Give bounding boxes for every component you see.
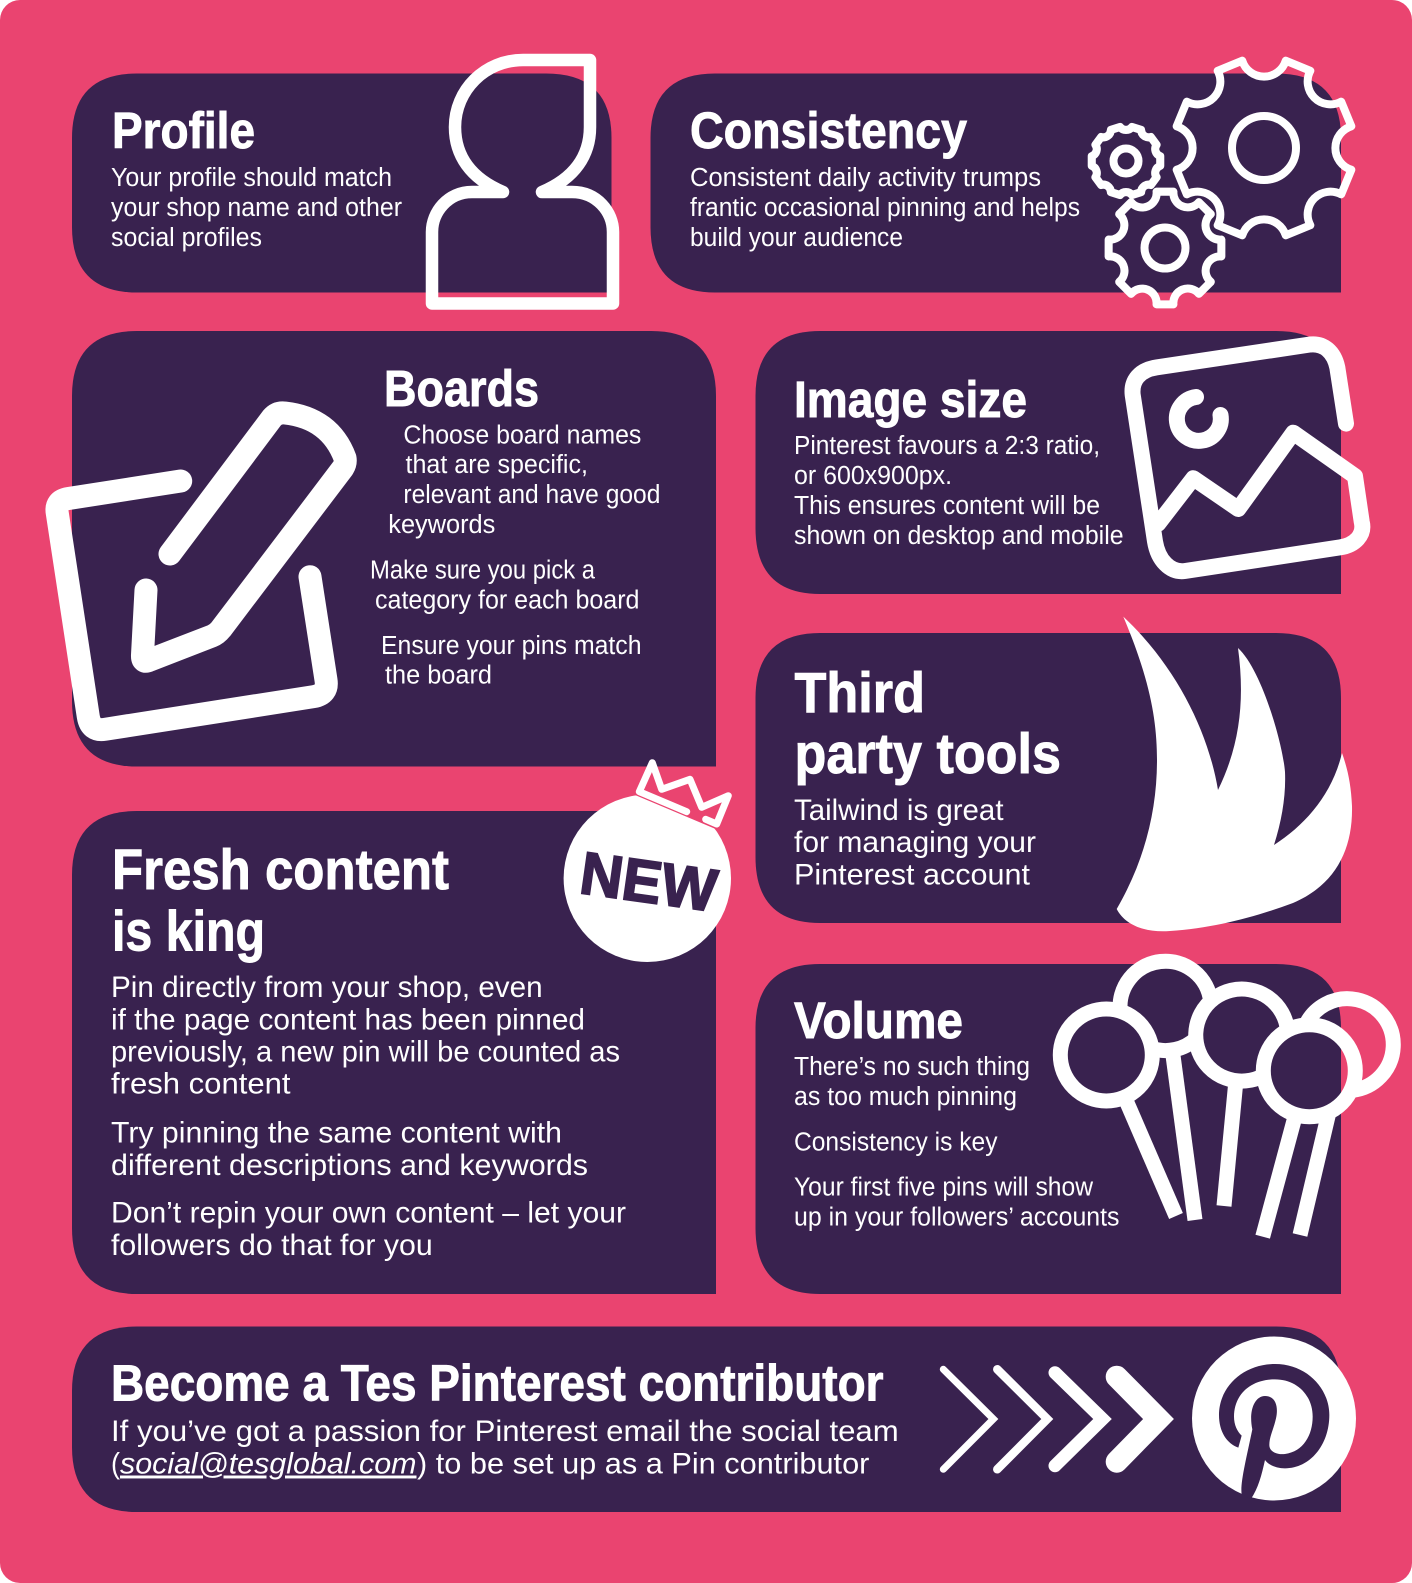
text: boards body: that are specific, [406,451,588,479]
text: image size body: shown on desktop and mobile [794,522,1124,550]
heading: profile: Profile [112,102,255,159]
panel: image size [756,331,1362,594]
icon: person [432,60,613,304]
heading: fresh content: Fresh content [112,838,449,902]
small gear [1092,127,1160,195]
text: volume body: Consistency is key [794,1128,998,1156]
text: boards body: keywords [388,511,495,539]
text: consistency body: build your audience [690,224,903,252]
icon: picture frame [1132,344,1362,571]
panel: profile [72,60,613,304]
text: boards body [370,422,660,690]
text: profile body [111,164,402,252]
text: consistency body: Consistent daily activity trumps [690,164,1041,192]
heading: third party tools: Third [794,661,925,725]
text: boards body: relevant and have good [403,481,660,509]
heading: boards: Boards [384,360,539,417]
text: profile body: social profiles [111,224,262,252]
text: fresh content body [111,971,626,1262]
text: contributor body: ) to be set up as a Pin contributor [417,1448,870,1480]
panel: third party tools [756,617,1352,931]
heading: third party tools [794,661,1061,786]
heading: fresh content: is king [112,900,265,964]
heading: image size: Image size [794,371,1027,428]
text: volume body: Your first five pins will show [794,1174,1094,1202]
text: fresh content body: fresh content [111,1068,290,1100]
text: fresh content body: Don’t repin your own content – let your [111,1196,626,1230]
text: volume body: There’s no such thing [794,1053,1030,1081]
text: third party body: for managing your [794,826,1036,859]
text: profile body: your shop name and other [111,194,402,222]
text: contributor body: If you’ve got a passion for Pinterest email the social team [111,1415,899,1448]
heading: volume: Volume [794,992,963,1049]
panel: contributor call to action [72,1326,1356,1512]
text: image size body [794,432,1124,550]
text: boards body: category for each board [375,586,640,614]
panel: consistency [650,61,1351,320]
heading: contributor: Become a Tes Pinterest contributor [111,1354,884,1412]
text: contributor body: ( [111,1448,120,1480]
medium gear [1093,176,1237,320]
panel: boards [57,331,716,766]
text: consistency body: frantic occasional pinning and helps [690,194,1080,222]
badge: new with crown [564,763,740,962]
text: boards body: Make sure you pick a [370,556,596,584]
text: contributor body [111,1415,899,1480]
text: fresh content body: different descriptions and keywords [111,1149,588,1182]
icon: gears [1092,61,1351,320]
text: boards body: Ensure your pins match [381,632,642,660]
text: contributor body: social@tesglobal.com [120,1448,416,1480]
panel: fresh content [72,811,716,1294]
arrows: chevrons [943,1369,1158,1469]
text: image size body: This ensures content will be [794,492,1100,520]
panel: volume [756,961,1393,1294]
heading: consistency: Consistency [690,102,968,159]
text: boards body: the board [385,662,492,690]
text: image size body: Pinterest favours a 2:3 ratio, [794,432,1100,460]
text: consistency body [690,164,1080,252]
text: fresh content body: followers do that for you [111,1229,433,1262]
heading: fresh content [112,838,449,964]
badge label: NEW [576,839,722,925]
text: third party body: Pinterest account [794,858,1030,892]
text: volume body [794,1053,1120,1232]
icon: tailwind logo [1117,617,1352,931]
text: fresh content body: previously, a new pin will be counted as [111,1036,620,1068]
text: volume body: up in your followers’ accounts [794,1204,1120,1232]
large gear [1177,61,1351,235]
text: fresh content body: if the page content has been pinned [111,1004,585,1036]
text: third party body [794,794,1036,892]
icon: pencil and paper [57,413,345,730]
text: profile body: Your profile should match [111,164,392,192]
heading: third party tools: party tools [794,722,1061,786]
text: image size body: or 600x900px. [794,462,952,490]
icon: pinterest logo [1192,1336,1356,1500]
text: fresh content body: Pin directly from your shop, even [111,971,543,1004]
text: fresh content body: Try pinning the same content with [111,1116,562,1150]
icon: lollipops [1060,961,1393,1237]
text: boards body: Choose board names [403,422,641,450]
text: third party body: Tailwind is great [794,794,1004,827]
text: volume body: as too much pinning [794,1083,1017,1111]
